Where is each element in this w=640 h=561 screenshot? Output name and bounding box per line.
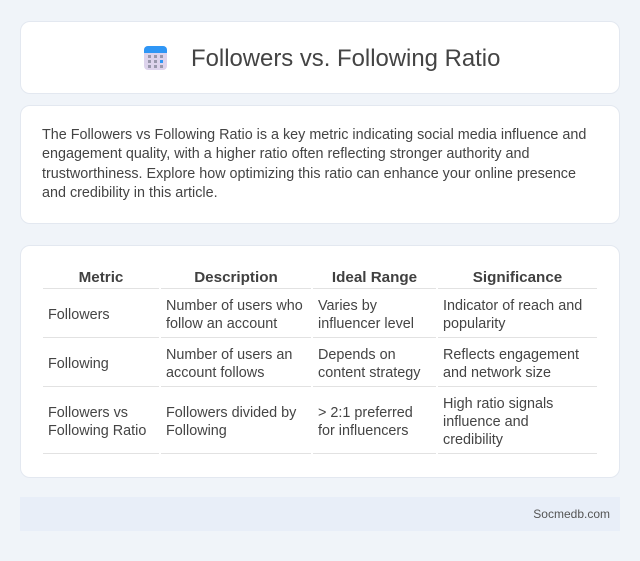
text: credibility — [443, 432, 503, 448]
footer text: Socmedb.com — [533, 507, 610, 521]
text: for influencers — [318, 423, 408, 439]
text: influence and — [443, 414, 529, 430]
row 1: Followers — [48, 307, 110, 323]
footer bar — [20, 497, 620, 531]
text: Reflects engagement — [443, 347, 579, 363]
text: Indicator of reach and — [443, 298, 582, 314]
row 3 — [48, 405, 146, 439]
text: Varies by — [318, 298, 377, 314]
icon: calendar — [144, 46, 167, 70]
row 3: Following Ratio — [48, 423, 146, 439]
header: Metric: Metric — [79, 269, 123, 286]
text: account follows — [166, 365, 264, 381]
text: content strategy — [318, 365, 420, 381]
intro card — [20, 105, 620, 224]
table card — [20, 245, 620, 478]
intro text: The Followers vs Following Ratio is a key metric indicating social media influence and — [42, 126, 586, 142]
text: High ratio signals — [443, 396, 553, 412]
title: Followers vs. Following Ratio — [191, 45, 500, 72]
text: Depends on — [318, 347, 396, 363]
text: Following — [166, 423, 227, 439]
text: Number of users who — [166, 298, 303, 314]
text: > 2:1 preferred — [318, 405, 413, 421]
text: and network size — [443, 365, 551, 381]
text: popularity — [443, 316, 505, 332]
table — [43, 269, 597, 455]
header: Significance: Significance — [473, 269, 562, 286]
text: follow an account — [166, 316, 277, 332]
text: influencer level — [318, 316, 414, 332]
text: Followers divided by — [166, 405, 296, 421]
row 3: Followers vs — [48, 405, 128, 421]
header card — [20, 21, 620, 94]
header: Description: Description — [194, 269, 278, 286]
row 2: Following — [48, 356, 109, 372]
intro text — [42, 126, 586, 201]
text: Number of users an — [166, 347, 292, 363]
intro text: engagement quality, with a higher ratio often reflecting stronger authority and — [42, 146, 529, 162]
header: Ideal Range: Ideal Range — [332, 269, 417, 286]
intro text: and credibility in this article. — [42, 185, 218, 201]
intro text: trustworthiness. Explore how optimizing this ratio can enhance your online presence — [42, 166, 576, 182]
